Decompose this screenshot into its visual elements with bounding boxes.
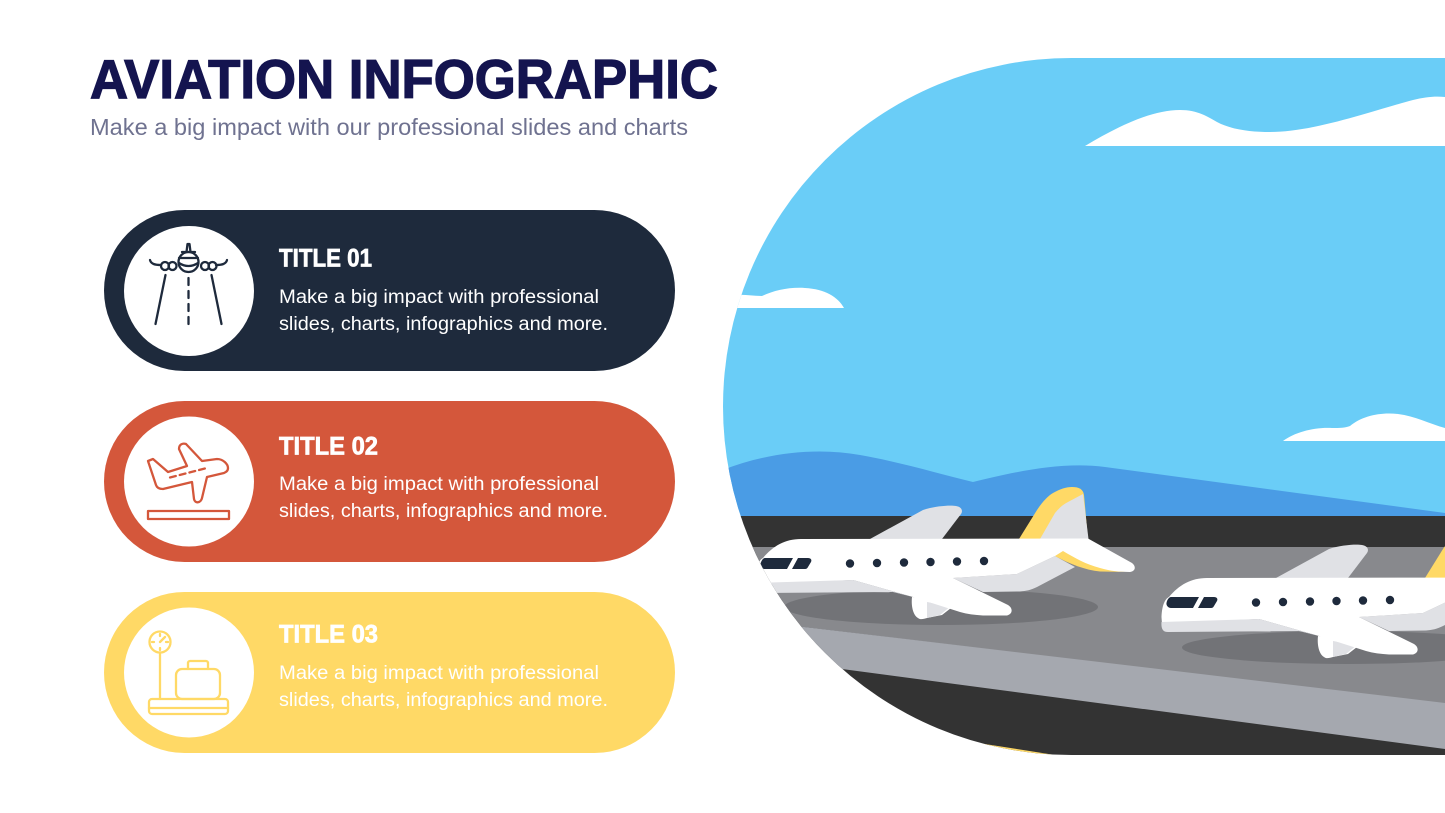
icon: plane landing on runway [150, 244, 227, 324]
yellow runway marking [983, 744, 1052, 754]
title: AVIATION INFOGRAPHIC [90, 48, 718, 110]
text: title 01: TITLE 01 [279, 244, 372, 272]
subtitle: Make a big impact with our professional slides and charts [90, 114, 688, 140]
panel: title 02 card [104, 401, 675, 562]
ground [720, 516, 1445, 756]
icon: plane taking off [148, 444, 229, 519]
panel: title 01 card [104, 210, 675, 371]
text: description 01: slides, charts, infographics and more. [279, 314, 608, 335]
text: description 03 [279, 663, 608, 711]
text: description 02 [279, 474, 608, 522]
text: description 03: slides, charts, infographics and more. [279, 690, 608, 711]
text: description 01: Make a big impact with professional [279, 287, 599, 308]
text: title 02: TITLE 02 [279, 432, 378, 460]
plane shadow: first [784, 589, 1098, 625]
text: title 03: TITLE 03 [279, 620, 378, 648]
text: description 02: Make a big impact with professional [279, 474, 599, 495]
icon: baggage scale [149, 632, 228, 714]
runway stripe [802, 626, 1445, 749]
plane: first [755, 487, 1135, 619]
plane shadow: second [1182, 631, 1445, 664]
cloud: left [737, 288, 844, 308]
plane: second [1161, 544, 1445, 658]
text: description 01 [279, 287, 608, 335]
panel: airport illustration [720, 58, 1445, 756]
sky [720, 58, 1445, 518]
cloud: top right [1085, 97, 1445, 146]
text: description 03: Make a big impact with professional [279, 663, 599, 684]
apron [720, 547, 1445, 704]
text: description 02: slides, charts, infographics and more. [279, 501, 608, 522]
panel: title 03 card [104, 592, 675, 753]
cloud: right [1283, 414, 1445, 441]
mountains [720, 452, 1445, 518]
